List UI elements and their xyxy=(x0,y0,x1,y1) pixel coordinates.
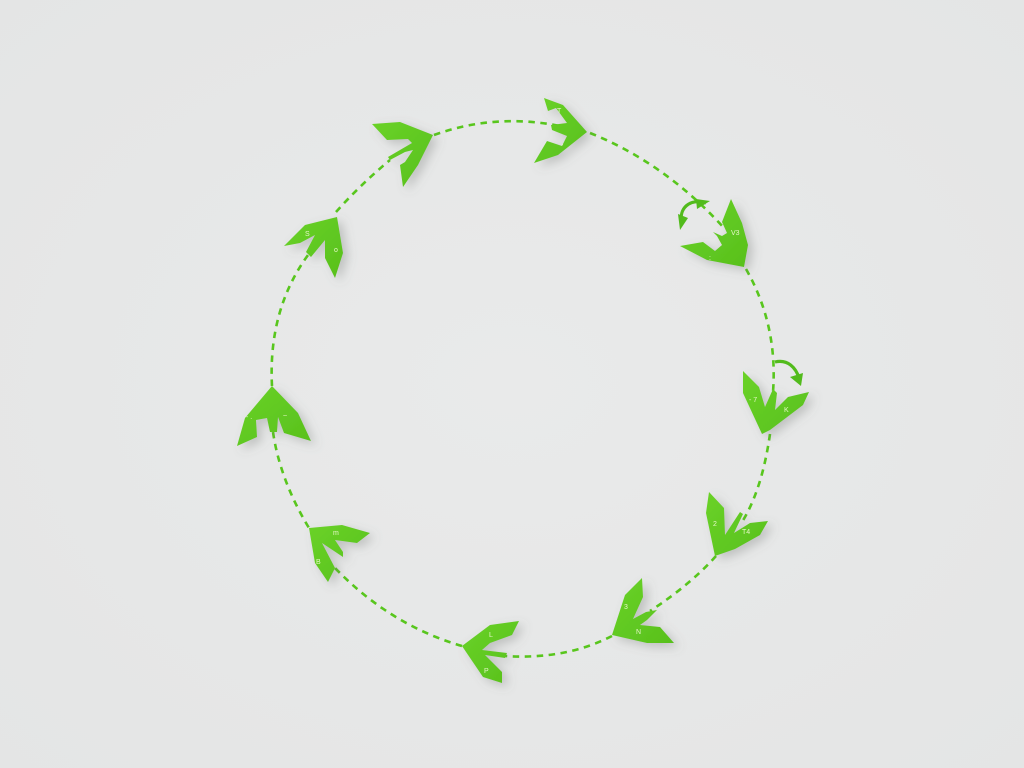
arrow 2: top xyxy=(534,98,587,163)
arrow 10: upper left: S xyxy=(305,231,310,238)
dashed ring connecting the arrows xyxy=(272,121,774,657)
arrow 6: bottom right: 3 xyxy=(624,604,628,611)
arrow 3: upper right: V3 xyxy=(731,230,740,237)
arrow 6: bottom right: N xyxy=(636,629,641,636)
arrow 2: top: T xyxy=(557,108,562,115)
icon: double-headed curved arrow xyxy=(678,199,710,230)
arrow 6: bottom right xyxy=(612,578,674,643)
arrow 2: top: - xyxy=(561,142,564,149)
arrow 4: right: - 7 xyxy=(749,397,757,404)
arrow 8: lower left: B xyxy=(316,559,321,566)
arrow 10: upper left xyxy=(284,217,343,278)
arrow 9: left: ~ xyxy=(283,413,287,420)
arrow 4: right: K xyxy=(784,407,789,414)
icon: curved arrow xyxy=(775,361,803,386)
arrow 3: upper right: : xyxy=(709,255,711,262)
arrow 1: top left xyxy=(372,122,433,187)
arrow 8: lower left: m xyxy=(333,530,339,537)
arrow 5: lower right xyxy=(706,492,768,556)
arrow 4: right xyxy=(743,371,809,434)
arrow 10: upper left: o xyxy=(334,247,338,254)
arrow 5: lower right: T4 xyxy=(742,529,750,536)
arrow 7: bottom: P xyxy=(484,668,489,675)
arrow 5: lower right: 2 xyxy=(713,521,717,528)
arrow 7: bottom: L xyxy=(489,632,493,639)
arrow 3: upper right xyxy=(680,199,748,267)
arrow 9: left: - . xyxy=(246,414,252,421)
arrow 8: lower left xyxy=(309,525,370,582)
arrow 9: left xyxy=(237,386,311,446)
arrow 7: bottom xyxy=(462,621,519,683)
